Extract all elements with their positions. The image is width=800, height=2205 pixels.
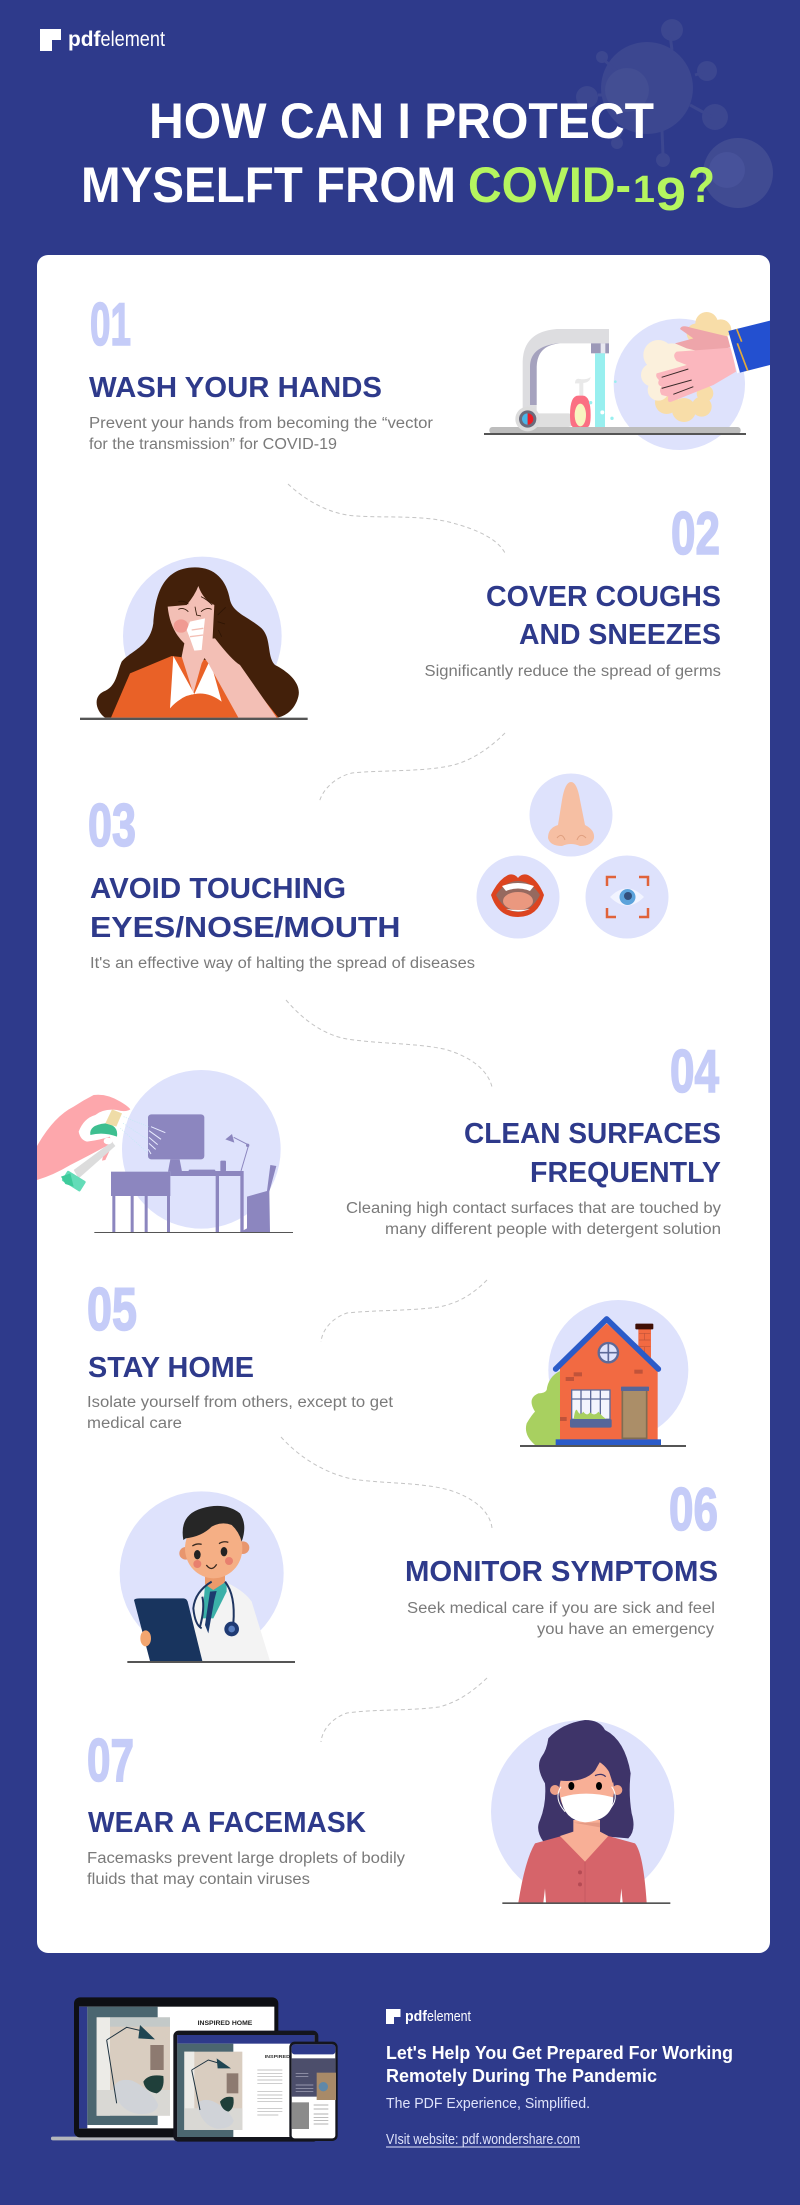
title: MYSELFT FROM (81, 157, 456, 213)
title: HOW CAN I PROTECT (149, 93, 654, 149)
heading: MONITOR SYMPTOMS (405, 1556, 718, 1588)
heading: COVER COUGHS (486, 581, 721, 613)
laptop: INSPIRED HOME (198, 2020, 252, 2027)
step 5: stay home (87, 1276, 688, 1447)
step 4: clean surfaces (37, 1038, 721, 1238)
title: 1 (633, 169, 655, 211)
number 05: 05 (87, 1276, 137, 1343)
step 3: avoid touching (88, 774, 668, 972)
dashed connector paths (281, 484, 505, 1742)
description: many different people with detergent solution (385, 1221, 721, 1238)
logo: pdfelement: element (100, 28, 165, 51)
heading (464, 1118, 721, 1189)
description: medical care (87, 1415, 182, 1432)
step 2: cover coughs and sneezes (80, 500, 721, 720)
heading: WASH YOUR HANDS (89, 372, 382, 404)
description: Prevent your hands from becoming the “vector (89, 415, 433, 432)
number 02: 02 (671, 500, 720, 567)
title: COVID- (468, 157, 631, 213)
icon: woman sneezing (80, 557, 308, 720)
footer: headline (386, 2042, 733, 2086)
step 6: monitor symptoms (120, 1476, 718, 1663)
footer: devices mockup (51, 1997, 338, 2142)
footer: tagline: The PDF Experience, Simplified. (386, 2095, 590, 2112)
description: Cleaning high contact surfaces that are touched by (346, 1200, 721, 1217)
tablet: INSPIRED (265, 2054, 290, 2060)
number 07: 07 (87, 1727, 134, 1794)
step 1: wash your hands (89, 291, 770, 453)
description: fluids that may contain viruses (87, 1871, 310, 1888)
footer: logo (386, 2008, 472, 2025)
description: Significantly reduce the spread of germs (424, 663, 721, 680)
number 04: 04 (670, 1038, 719, 1105)
step 7: wear a facemask (87, 1720, 674, 1904)
heading: AVOID TOUCHING (90, 873, 346, 905)
white card (37, 255, 770, 1953)
footer: headline: Let's Help You Get Prepared For Working (386, 2042, 733, 2063)
heading: CLEAN SURFACES (464, 1118, 721, 1150)
heading: FREQUENTLY (530, 1157, 721, 1189)
description: for the transmission” for COVID-19 (89, 436, 337, 453)
description: Isolate yourself from others, except to get (87, 1394, 394, 1411)
description: Seek medical care if you are sick and feel (407, 1600, 715, 1617)
description (346, 1200, 721, 1238)
icon: woman wearing a facemask (491, 1720, 674, 1904)
decorative virus (576, 19, 773, 208)
footer: website link: VIsit website: pdf.wondershare.com (386, 2132, 580, 2148)
title: 9 (656, 168, 686, 220)
icon: spraying a desk (37, 1070, 293, 1233)
heading: EYES/NOSE/MOUTH (90, 912, 400, 944)
heading (90, 873, 400, 944)
laptop (51, 1997, 278, 2140)
heading: WEAR A FACEMASK (88, 1807, 366, 1839)
icon: nose (530, 774, 612, 856)
description: It's an effective way of halting the spread of diseases (90, 955, 475, 972)
icon: washing hands at sink (484, 312, 770, 450)
number 03: 03 (88, 792, 136, 859)
phone (289, 2042, 338, 2141)
logo: pdfelement: pdf (68, 28, 101, 51)
description (87, 1850, 405, 1888)
icon: house (520, 1300, 688, 1447)
description: you have an emergency (537, 1621, 714, 1638)
heading: STAY HOME (88, 1352, 254, 1384)
tablet (173, 2031, 318, 2142)
icon: mouth (476, 856, 560, 938)
icon: doctor (120, 1491, 295, 1663)
number 01: 01 (90, 291, 131, 358)
heading: AND SNEEZES (519, 619, 721, 651)
footer: logo: pdf (405, 2008, 428, 2025)
icon: eye (586, 856, 668, 938)
description (87, 1394, 394, 1432)
description: Facemasks prevent large droplets of bodily (87, 1850, 405, 1867)
description (89, 415, 433, 453)
title (81, 93, 715, 220)
title: ? (688, 157, 715, 213)
description (407, 1600, 715, 1638)
footer: headline: Remotely During The Pandemic (386, 2065, 657, 2086)
number 06: 06 (669, 1476, 718, 1543)
heading (486, 581, 721, 651)
logo: pdfelement (40, 28, 165, 51)
footer: logo: element (427, 2008, 472, 2025)
